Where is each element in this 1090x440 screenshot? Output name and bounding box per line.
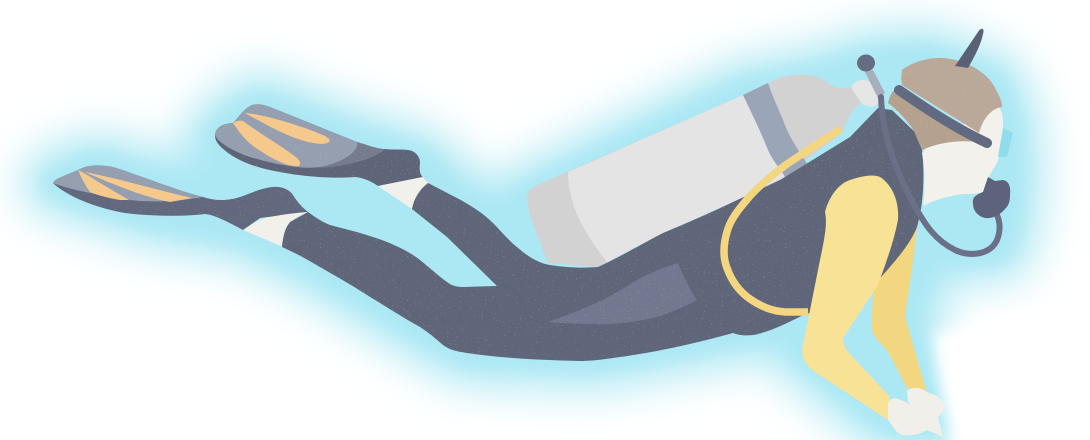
near fin orange stripes: [78, 170, 129, 200]
white patch beside hands: [935, 290, 1090, 440]
tank valve: [851, 54, 885, 106]
blue glow behind diver: [53, 58, 1010, 425]
wetsuit body and legs: [282, 108, 923, 361]
near arm: [802, 175, 898, 420]
mask strap: [899, 90, 987, 143]
far leg sock: [378, 177, 428, 209]
mouthpiece: [973, 177, 1010, 218]
far arm: [872, 227, 927, 393]
near leg sock: [243, 212, 308, 247]
far fin: [215, 104, 423, 186]
breathing hose: [881, 97, 1000, 254]
yellow hose on vest: [724, 129, 841, 312]
head: [888, 58, 1003, 206]
face: [922, 106, 1003, 206]
hood lower: [888, 88, 945, 148]
hands: [888, 388, 946, 437]
mask glass: [998, 128, 1013, 157]
near fin: [53, 165, 308, 230]
far fin orange stripes: [245, 113, 330, 144]
tank shell: [527, 75, 861, 267]
hood upper: [901, 58, 1002, 133]
tank band: [743, 83, 808, 177]
snorkel tip: [955, 29, 984, 68]
wetsuit hip shading: [548, 263, 697, 324]
scuba tank: [527, 75, 861, 267]
tank lighter middle: [568, 95, 785, 262]
